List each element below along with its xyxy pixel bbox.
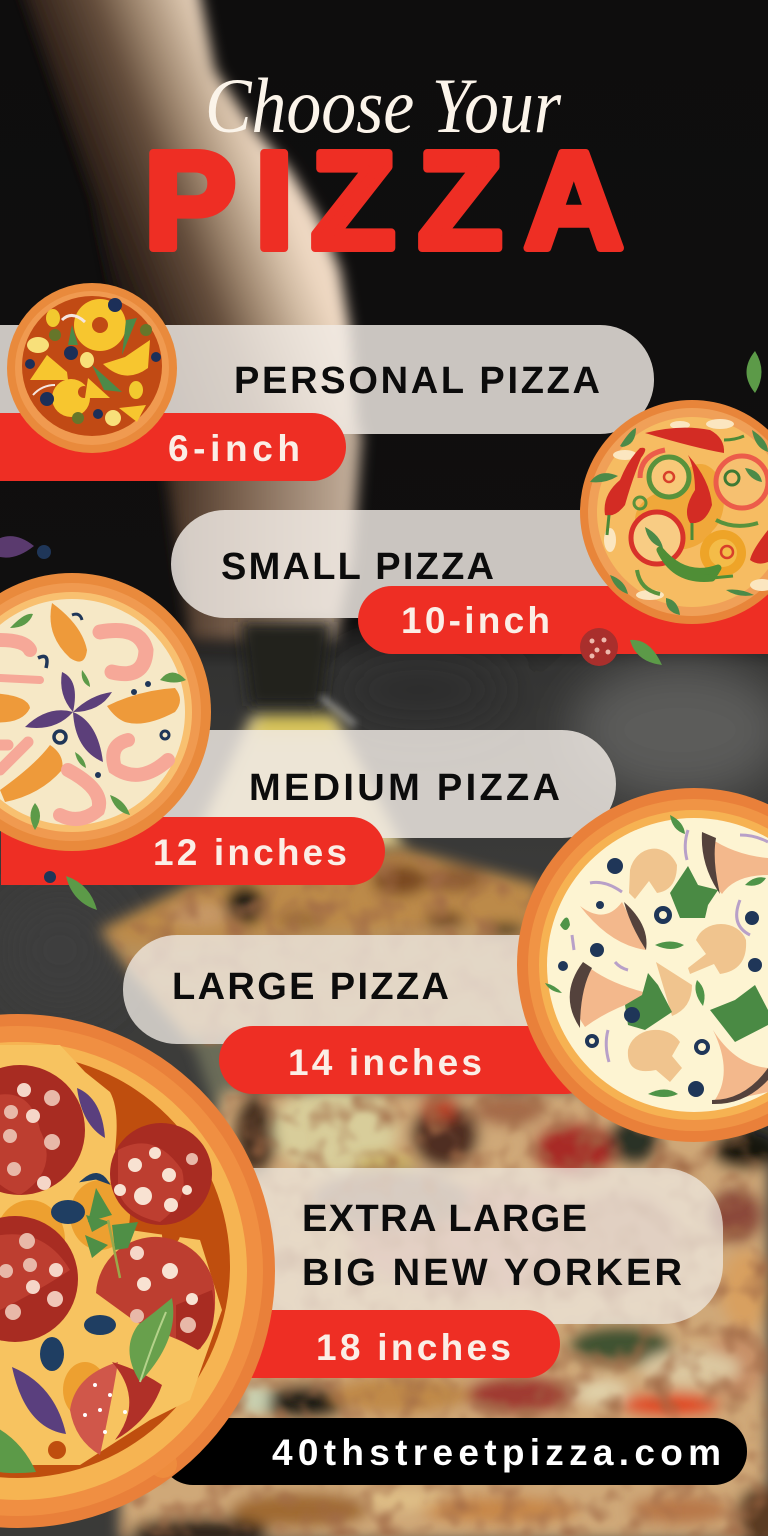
website pill (160, 1418, 747, 1485)
panel: small pizza (171, 351, 768, 666)
label pill: extra large pizza (170, 1168, 723, 1324)
heading: personal pizza: PERSONAL PIZZA (234, 360, 600, 402)
script heading: Choose Your: Choose Your (205, 62, 562, 149)
size text: 10-inch: 10-inch (401, 600, 550, 641)
icon: pepperoni pizza (0, 1014, 275, 1528)
heading: large pizza: LARGE PIZZA (172, 966, 449, 1008)
main heading: PIZZA: PIZZA (144, 124, 624, 278)
size pill: 10-inch (358, 586, 768, 654)
icon: pineapple pizza (7, 283, 177, 453)
size text: 12 inches: 12 inches (153, 832, 347, 873)
arm (15, 0, 362, 640)
icon: mushroom pizza (517, 788, 768, 1142)
label pill: large pizza (123, 935, 583, 1044)
icon: olive top left (37, 545, 51, 559)
icon: pepperoni slice (580, 628, 618, 666)
panel: extra large pizza (0, 1014, 747, 1528)
size pill: 6-inch (0, 413, 346, 481)
label pill: personal pizza (0, 325, 654, 434)
panel: large pizza (123, 788, 768, 1142)
size text: 14 inches: 14 inches (288, 1042, 482, 1083)
panel: personal pizza (0, 283, 654, 481)
icon: purple leaf (0, 536, 34, 558)
label pill: small pizza (171, 510, 641, 618)
heading: extra large big new yorker: EXTRA LARGE (302, 1198, 587, 1240)
heading: medium pizza: MEDIUM PIZZA (249, 767, 560, 809)
icon: seafood pizza (0, 573, 211, 851)
panel: medium pizza (0, 573, 616, 910)
icon: pepper pizza (580, 400, 768, 624)
heading: small pizza: SMALL PIZZA (221, 546, 494, 588)
website text: 40thstreetpizza.com (272, 1432, 721, 1473)
heading: extra large big new yorker: BIG NEW YORKER (302, 1252, 682, 1294)
icon: basil leaf (630, 640, 662, 665)
size pill: 18 inches (200, 1310, 560, 1378)
size text: 6-inch: 6-inch (168, 428, 300, 469)
title (144, 62, 624, 278)
label pill: medium pizza (120, 730, 616, 838)
blurred whole pizza (120, 1088, 768, 1536)
icon: leaf top right (746, 351, 762, 393)
size pill: 14 inches (219, 1026, 599, 1094)
heading: extra large big new yorker (302, 1198, 682, 1294)
icon: leaf (66, 876, 97, 910)
blurred pizza slice (100, 848, 540, 1110)
icon: olive (44, 871, 56, 883)
size pill: 12 inches (1, 817, 385, 885)
size text: 18 inches: 18 inches (316, 1327, 511, 1368)
